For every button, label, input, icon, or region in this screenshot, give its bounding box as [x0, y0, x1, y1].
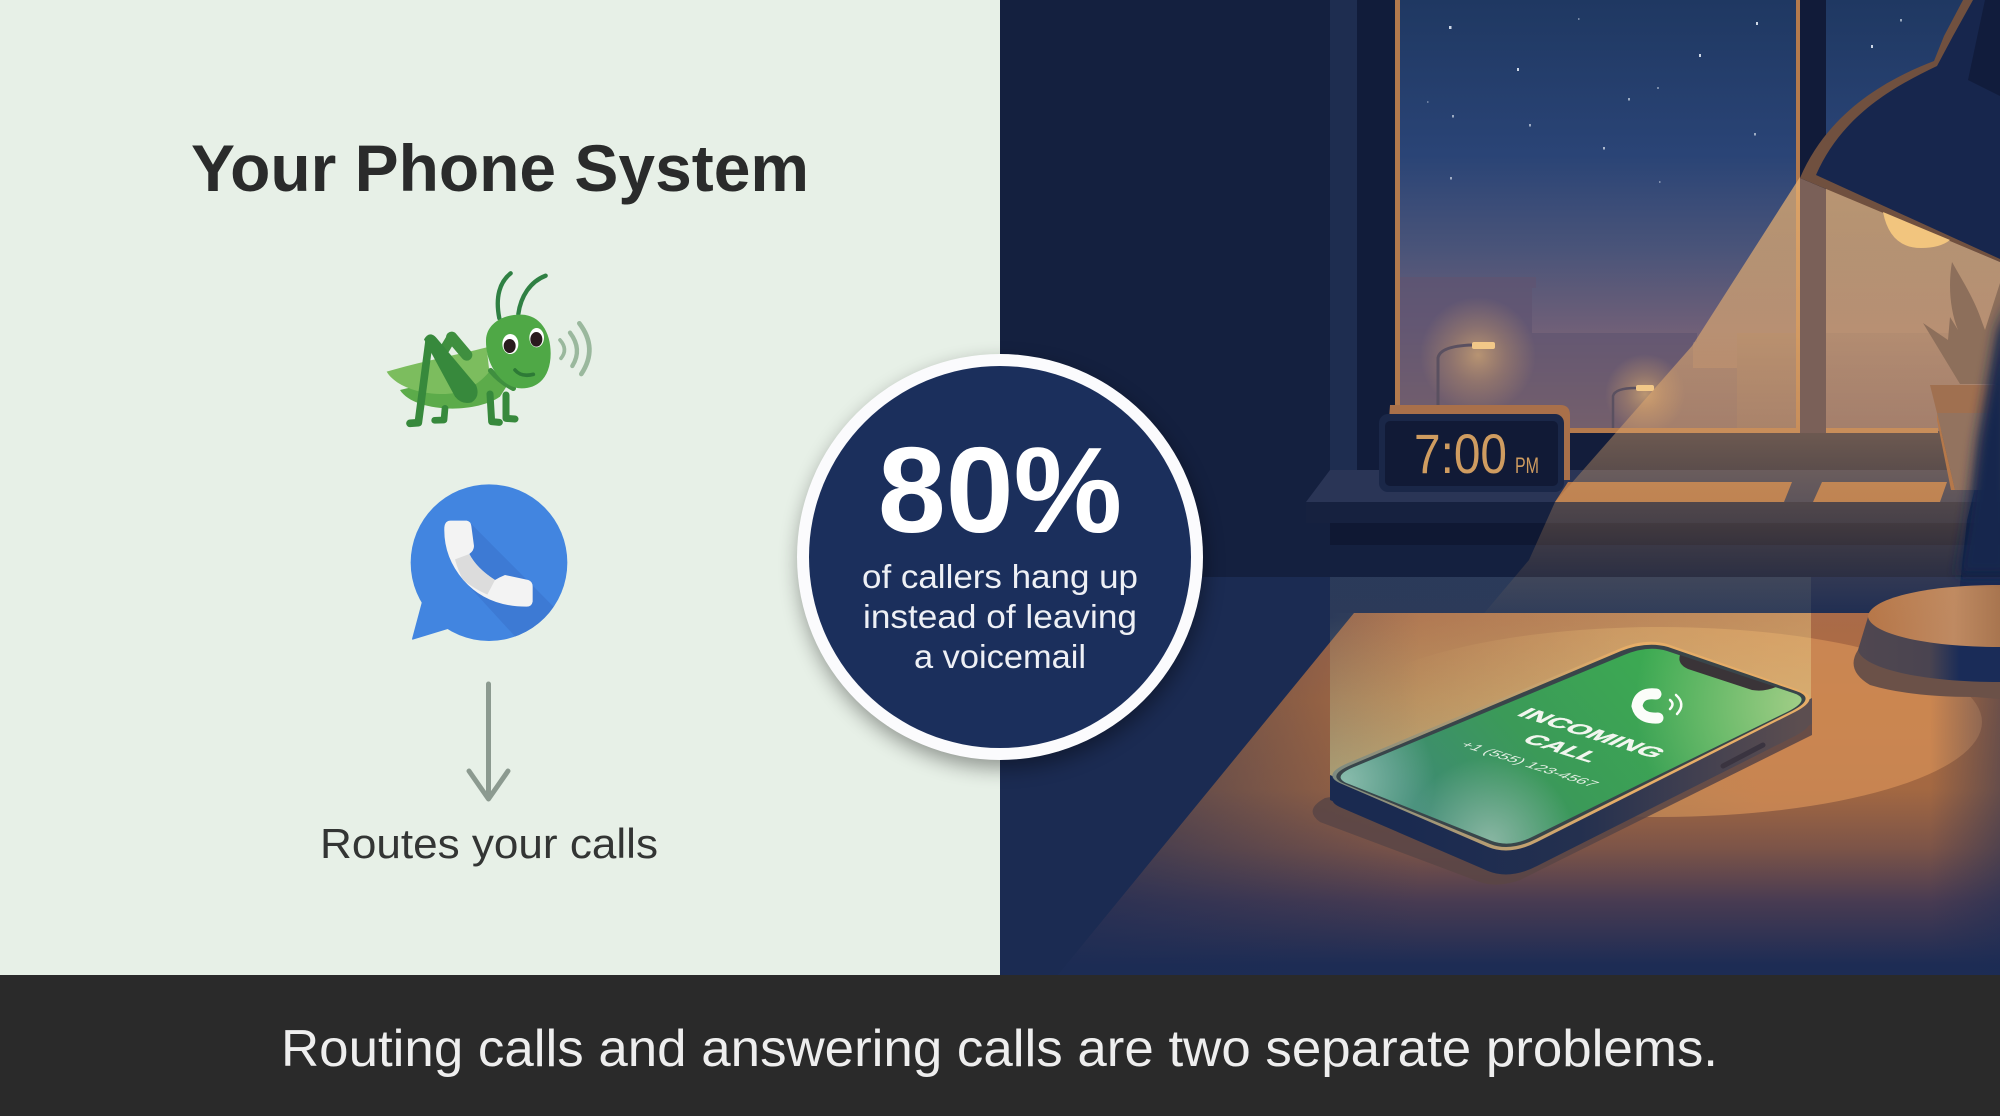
stat description: instead of leaving — [863, 598, 1137, 635]
panel: left background — [0, 0, 1000, 975]
stat description: of callers hang up — [862, 558, 1138, 595]
text: phone number: +1 (555) 123-4567 — [1456, 740, 1602, 789]
street lamps — [1420, 297, 1685, 434]
clock time: 7:00 — [1414, 422, 1507, 485]
lamp base shadow — [1854, 650, 2000, 699]
label: Routes your calls: Routes your calls — [320, 820, 658, 867]
stat description: a voicemail — [914, 638, 1086, 675]
desk — [1058, 613, 2000, 975]
phone bezel — [1336, 645, 1806, 847]
arrow: down to label — [469, 684, 508, 799]
light pool on desk — [1338, 627, 1982, 817]
desk right falloff — [1930, 613, 2000, 975]
footer caption: Routing calls and answering calls are two separate problems. — [281, 1020, 1718, 1078]
clock pm: PM — [1515, 453, 1539, 478]
window — [1395, 0, 2000, 434]
stat number: 80% — [878, 422, 1122, 558]
footer bar — [0, 975, 2000, 1116]
stars — [1427, 18, 1902, 183]
under window wall — [1397, 433, 2000, 470]
plant — [1923, 262, 2000, 490]
side button — [1723, 745, 1763, 766]
buildings — [1400, 277, 2000, 431]
alarm clock — [1379, 405, 1570, 492]
lamp shade — [1800, 0, 2000, 262]
text: call: CALL — [1516, 732, 1607, 765]
phone rim — [1332, 642, 1810, 851]
lamp base — [1858, 585, 2000, 682]
phone notch — [1674, 653, 1776, 691]
icon: grasshopper — [387, 273, 589, 423]
bulb — [1883, 212, 1950, 248]
wall background — [1000, 0, 2000, 975]
desk area background — [1000, 577, 2000, 975]
phone side — [1330, 666, 1812, 875]
heading: Your Phone System: Your Phone System — [191, 131, 809, 205]
window mullion — [1800, 0, 1826, 431]
light cone from lamp — [1470, 177, 2000, 630]
window frame — [1395, 0, 1938, 433]
phone screen — [1341, 649, 1802, 844]
icon: ringing handset — [1637, 694, 1681, 718]
icon: blue phone chat bubble — [411, 484, 573, 641]
phone shadow — [1313, 715, 1812, 885]
window sill — [1306, 470, 2000, 545]
wall panel strips — [1330, 0, 1397, 470]
screen glow column — [1330, 577, 1811, 787]
desk left falloff — [1058, 613, 1420, 975]
text: incoming: INCOMING — [1511, 706, 1672, 761]
callout: 80% statistic — [797, 354, 1205, 768]
stat description — [862, 558, 1138, 675]
panel: night scene — [1000, 0, 2000, 975]
phone — [1313, 642, 1812, 885]
cone right edge shadow — [1958, 300, 2000, 575]
